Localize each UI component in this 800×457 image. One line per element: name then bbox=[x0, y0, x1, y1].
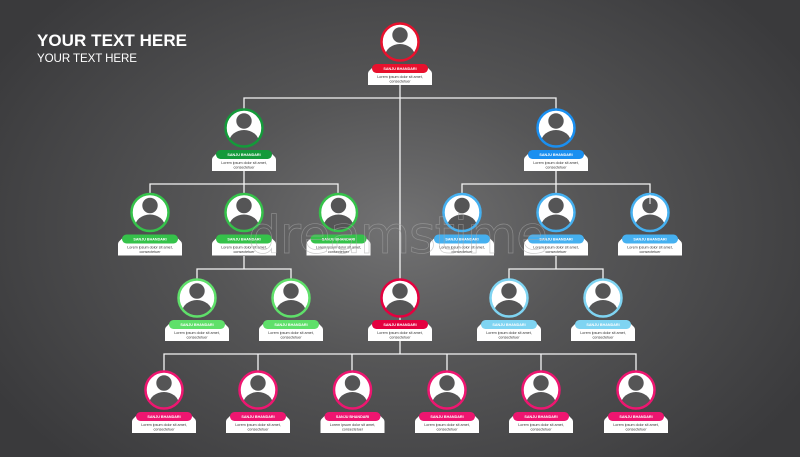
node: level 3 light green 1 bbox=[165, 280, 229, 341]
node: level 4 pink 4 bbox=[415, 372, 479, 433]
node: level 4 pink 5: consectetuer bbox=[530, 428, 552, 432]
node: level 4 pink 3 bbox=[320, 372, 384, 433]
node: level 4 pink 6 bbox=[604, 372, 668, 433]
node: level 4 pink 1 bbox=[132, 372, 196, 433]
heading: YOUR TEXT HERE bbox=[37, 31, 187, 50]
node: level 3 centre: Lorem ipsum dolor sit amet, bbox=[377, 331, 423, 335]
node: level 4 pink 2: SANJU BHANDARI bbox=[241, 415, 275, 419]
node: top level: consectetuer bbox=[389, 80, 411, 84]
node: level 2 green 2: Lorem ipsum dolor sit amet, bbox=[221, 246, 267, 250]
node: level 3 centre bbox=[368, 280, 432, 341]
watermark: dreamstime bbox=[248, 206, 548, 266]
node: level 1 right bbox=[524, 110, 588, 171]
subheading: YOUR TEXT HERE bbox=[37, 52, 137, 65]
node: level 3 light blue 1 bbox=[477, 280, 541, 341]
node: level 2 blue 3: SANJU BHANDARI bbox=[633, 238, 667, 242]
node: level 2 green 1: Lorem ipsum dolor sit amet, bbox=[127, 246, 173, 250]
node: level 4 pink 4: SANJU BHANDARI bbox=[430, 415, 464, 419]
node: level 3 light blue 2: Lorem ipsum dolor sit amet, bbox=[580, 331, 626, 335]
node: level 4 pink 6: consectetuer bbox=[625, 428, 647, 432]
node: level 4 pink 1: SANJU BHANDARI bbox=[147, 415, 181, 419]
node: level 1 right: SANJU BHANDARI bbox=[539, 153, 573, 157]
node: level 4 pink 1: Lorem ipsum dolor sit amet, bbox=[141, 423, 187, 427]
node: level 4 pink 2 bbox=[226, 372, 290, 433]
node: level 3 light green 2: Lorem ipsum dolor sit amet, bbox=[268, 331, 314, 335]
node: level 4 pink 1: consectetuer bbox=[153, 428, 175, 432]
node: level 2 green 3: consectetuer bbox=[328, 250, 350, 254]
node: level 3 light green 2 bbox=[259, 280, 323, 341]
node: level 4 pink 6: Lorem ipsum dolor sit amet, bbox=[613, 423, 659, 427]
node: level 4 pink 5: Lorem ipsum dolor sit amet, bbox=[518, 423, 564, 427]
node: level 3 light blue 1: consectetuer bbox=[498, 336, 520, 340]
node: level 4 pink 2: consectetuer bbox=[247, 428, 269, 432]
node: level 3 light green 2: SANJU BHANDARI bbox=[274, 323, 308, 327]
node: level 2 green 2 bbox=[212, 194, 276, 256]
node: level 4 pink 4: Lorem ipsum dolor sit amet, bbox=[424, 423, 470, 427]
node: level 3 centre: SANJU BHANDARI bbox=[383, 323, 417, 327]
node: level 2 green 3 bbox=[306, 194, 370, 256]
node: level 3 centre: consectetuer bbox=[389, 336, 411, 340]
node: top level: SANJU BHANDARI bbox=[383, 67, 417, 71]
node: level 3 light blue 2 bbox=[571, 280, 635, 341]
node: level 4 pink 3: Lorem ipsum dolor sit amet, bbox=[330, 423, 375, 427]
node: level 2 blue 3: Lorem ipsum dolor sit amet, bbox=[627, 246, 673, 250]
node: top level bbox=[368, 24, 432, 85]
node: level 3 light blue 2: consectetuer bbox=[592, 336, 614, 340]
node: level 2 blue 2 bbox=[524, 194, 588, 256]
node: level 2 blue 2: consectetuer bbox=[545, 250, 567, 254]
node: level 4 pink 5: SANJU BHANDARI bbox=[524, 415, 558, 419]
node: level 2 green 3: SANJU BHANDARI bbox=[322, 238, 355, 242]
node: level 1 right: consectetuer bbox=[545, 166, 567, 170]
node: level 1 right: Lorem ipsum dolor sit amet, bbox=[533, 161, 579, 165]
node: level 2 green 2: SANJU BHANDARI bbox=[227, 238, 261, 242]
node: level 2 blue 3: consectetuer bbox=[639, 250, 661, 254]
node: level 2 blue 1 bbox=[430, 194, 494, 256]
node: level 3 light green 2: consectetuer bbox=[280, 336, 302, 340]
node: level 3 light blue 2: SANJU BHANDARI bbox=[586, 323, 620, 327]
node: level 3 light blue 1: SANJU BHANDARI bbox=[492, 323, 526, 327]
node: level 4 pink 4: consectetuer bbox=[436, 428, 458, 432]
node: level 2 green 2: consectetuer bbox=[233, 250, 255, 254]
node: level 2 green 1 bbox=[118, 194, 182, 256]
node: level 2 blue 1: SANJU BHANDARI bbox=[445, 238, 479, 242]
node: level 4 pink 3: SANJU BHANDARI bbox=[336, 415, 369, 419]
node: level 1 left: consectetuer bbox=[233, 166, 255, 170]
node: level 1 left: Lorem ipsum dolor sit amet, bbox=[221, 161, 267, 165]
node: level 3 light blue 1: Lorem ipsum dolor sit amet, bbox=[486, 331, 532, 335]
node: level 3 light green 1: Lorem ipsum dolor sit amet, bbox=[174, 331, 220, 335]
node: level 2 blue 3 bbox=[618, 194, 682, 256]
node: level 2 blue 2: SANJU BHANDARI bbox=[539, 238, 573, 242]
node: level 4 pink 3: consectetuer bbox=[342, 428, 364, 432]
node: level 1 left: SANJU BHANDARI bbox=[227, 153, 261, 157]
node: level 4 pink 6: SANJU BHANDARI bbox=[619, 415, 653, 419]
node: top level: Lorem ipsum dolor sit amet, bbox=[377, 75, 423, 79]
node: level 4 pink 5 bbox=[509, 372, 573, 433]
title block bbox=[37, 31, 187, 65]
node: level 1 left bbox=[212, 110, 276, 171]
node: level 2 blue 1: consectetuer bbox=[451, 250, 473, 254]
node: level 3 light green 1: consectetuer bbox=[186, 336, 208, 340]
node: level 2 green 1: consectetuer bbox=[139, 250, 161, 254]
node: level 2 green 3: Lorem ipsum dolor sit amet, bbox=[316, 246, 361, 250]
connector lines bbox=[150, 85, 650, 372]
node: level 2 green 1: SANJU BHANDARI bbox=[133, 238, 167, 242]
node: level 3 light green 1: SANJU BHANDARI bbox=[180, 323, 214, 327]
node: level 4 pink 2: Lorem ipsum dolor sit amet, bbox=[235, 423, 281, 427]
node: level 2 blue 2: Lorem ipsum dolor sit amet, bbox=[533, 246, 579, 250]
node: level 2 blue 1: Lorem ipsum dolor sit amet, bbox=[439, 246, 485, 250]
